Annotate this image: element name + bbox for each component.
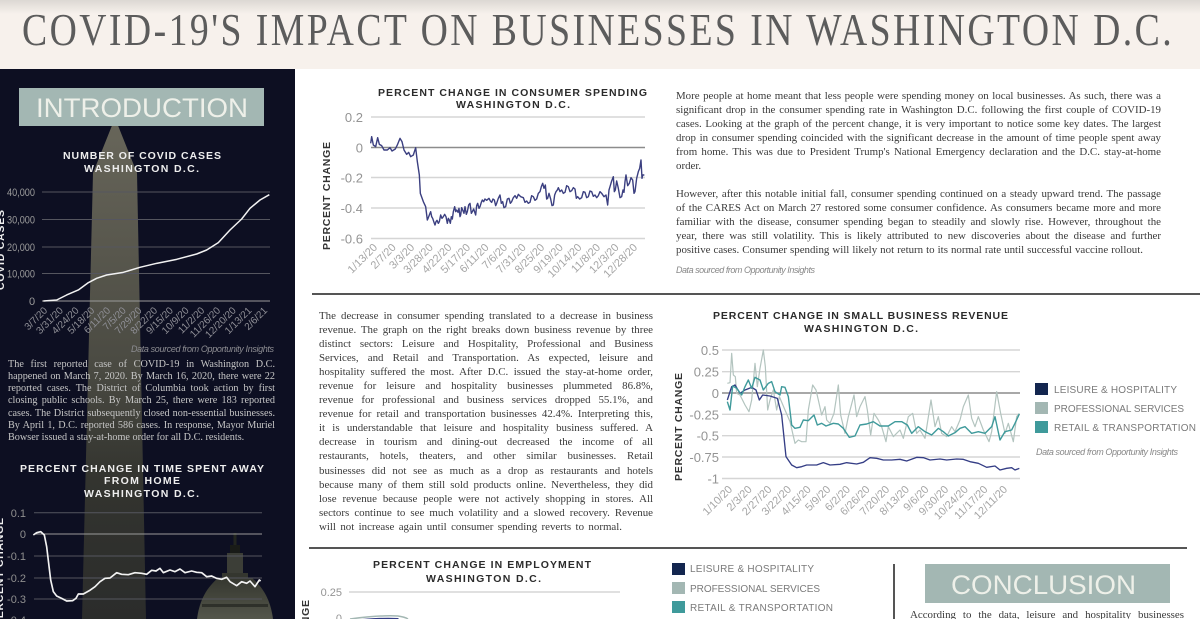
chart: number of covid cases: 8/22/20 xyxy=(129,305,160,337)
chart: number of covid cases: 10,000 xyxy=(7,268,35,280)
legend: employment sectors: PROFESSIONAL SERVICES xyxy=(690,584,820,595)
chart: percent change in small business revenue: 4/15/20 xyxy=(779,484,814,518)
heading: conclusion: CONCLUSION xyxy=(951,570,1136,600)
chart: percent change in small business revenue: WASHINGTON D.C. xyxy=(804,323,918,335)
title banner: COVID-19'S IMPACT ON BUSINESSES IN WASHINGTON D.C. xyxy=(22,6,1172,56)
chart: percent change in small business revenue: 7/20/20 xyxy=(858,484,892,518)
chart: number of covid cases: 10/9/20 xyxy=(160,305,192,337)
title banner xyxy=(0,0,1200,69)
chart: number of covid cases: 3/31/20 xyxy=(34,305,66,337)
chart: number of covid cases: 0 xyxy=(29,296,35,308)
text: business revenue analysis: revenue for leisure and hospitality businesses plummeted 86.8%, xyxy=(319,380,653,392)
chart: percent change in small business revenue: 3/22/20 xyxy=(760,484,794,518)
legend: revenue sectors: PROFESSIONAL SERVICES xyxy=(1054,404,1184,415)
chart: percent change in small business revenue: -0.25 xyxy=(689,407,719,422)
text: business revenue analysis: distinct sectors: Leisure and Hospitality, Professional and Business xyxy=(319,338,653,350)
chart: number of covid cases: 40,000 xyxy=(7,187,35,199)
text: business revenue analysis: lose revenue because people were not actively shopping in stores. All xyxy=(319,493,653,505)
chart: number of covid cases: NUMBER OF COVID CASES xyxy=(63,150,221,162)
chart: percent change in consumer spending: 7/6/20 xyxy=(480,242,510,272)
legend: employment sectors xyxy=(672,563,833,614)
chart: percent change in consumer spending: PERCENT CHANGE xyxy=(321,142,333,250)
chart: percent change in consumer spending: 5/17/20 xyxy=(439,242,473,276)
chart: percent change in consumer spending: 8/25/20 xyxy=(513,242,547,276)
icon: Washington Monument xyxy=(82,118,146,619)
text: introduction paragraph: Bowser issued a stay-at-home order for all D.C. residents. xyxy=(8,432,244,443)
chart: percent change in consumer spending xyxy=(321,87,647,280)
chart: percent change in employment: PERCENT CHANGE IN EMPLOYMENT xyxy=(373,559,592,571)
paragraph: consumer spending drop: More people at home meant that less people were spending money on local businesses. As such, there was a xyxy=(676,90,1161,102)
chart: percent change in small business revenue: 9/30/20 xyxy=(917,484,951,518)
chart: number of covid cases: 12/20/20 xyxy=(203,305,239,341)
chart: percent change in consumer spending: 12/28/20 xyxy=(601,242,640,280)
chart: percent change in small business revenue: 8/13/20 xyxy=(877,484,912,518)
legend: revenue sectors xyxy=(1035,383,1196,457)
chart: number of covid cases: Data sourced from Opportunity Insights xyxy=(131,344,274,354)
chart: percent change in consumer spending: 6/11/20 xyxy=(458,242,492,275)
chart: percent change in consumer spending: 3/28/20 xyxy=(401,242,436,276)
chart: percent change in time spent away from home: -0.1 xyxy=(7,551,26,563)
text: consumer spending analysis xyxy=(676,90,1161,275)
paragraph: consumer spending drop: cases. Looking at the graph of the percent change, it is very important to notice some key dates. The largest xyxy=(676,118,1161,130)
chart: percent change in consumer spending: 7/31/20 xyxy=(494,242,529,276)
paragraph: consumer spending drop: order. xyxy=(676,160,701,172)
text: business revenue analysis: Services, and Retail and Transportation. As expected, leisure and xyxy=(319,352,653,364)
text: business revenue analysis: revenue. The graph on the right breaks down business revenue by three xyxy=(319,324,653,336)
chart: percent change in small business revenue: 6/2/20 xyxy=(823,484,853,514)
text: business revenue analysis: revenue for retail and transportation businesses 42.4%. Interpreting this, xyxy=(319,408,653,420)
chart: percent change in small business revenue: 2/3/20 xyxy=(725,484,755,514)
paragraph: consumer spending drop: drop in consumer spending coincided with the significant decrease in the amount of time people spent away xyxy=(676,132,1161,144)
chart: percent change in small business revenue: -1 xyxy=(707,472,719,486)
source note: Data sourced from Opportunity Insights xyxy=(676,265,816,275)
chart: percent change in consumer spending: PERCENT CHANGE IN CONSUMER SPENDING xyxy=(378,87,647,99)
chart: percent change in consumer spending: 11/8/20 xyxy=(569,242,603,275)
chart: percent change in small business revenue: 10/24/20 xyxy=(932,484,971,522)
chart: percent change in consumer spending: 9/19/20 xyxy=(531,242,566,276)
text: introduction paragraph: closing public schools. By March 25, there were 183 reported xyxy=(8,395,275,406)
chart: number of covid cases: 3/7/20 xyxy=(23,305,50,333)
legend: revenue sectors: LEISURE & HOSPITALITY xyxy=(1054,385,1177,396)
chart: percent change in employment: WASHINGTON D.C. xyxy=(426,573,541,585)
legend: employment sectors: RETAIL & TRANSPORTATION xyxy=(690,603,833,614)
text: business revenue analysis: decrease in tourism and dining-out decreased the income of all xyxy=(319,436,653,448)
heading: conclusion xyxy=(925,564,1170,603)
chart: number of covid cases: WASHINGTON D.C. xyxy=(84,163,199,175)
chart: percent change in small business revenue: 1/10/20 xyxy=(701,484,735,518)
text: business revenue analysis: because many of them still sold products online. Nevertheless, they did xyxy=(319,479,653,491)
chart: number of covid cases: 6/11/20 xyxy=(82,305,113,336)
paragraph: consumer spending recovery: of the CARES Act on March 27 restored some consumer confidence. As consumers became more and more xyxy=(676,202,1161,214)
chart: number of covid cases: 11/26/20 xyxy=(188,305,223,340)
chart: number of covid cases: 30,000 xyxy=(7,214,35,226)
paragraph: consumer spending drop xyxy=(676,90,1161,172)
chart: percent change in small business revenue: -0.5 xyxy=(697,429,719,444)
chart: percent change in consumer spending: -0.6 xyxy=(341,232,363,246)
chart: percent change in small business revenue: 9/6/20 xyxy=(901,484,932,514)
icon: Capitol dome xyxy=(197,533,273,619)
text: introduction paragraph: cases. The District subsequently closed non-essential businesses. xyxy=(8,408,275,419)
chart: percent change in small business revenue: 11/17/20 xyxy=(952,484,991,522)
chart: number of covid cases: 4/24/20 xyxy=(50,305,82,337)
paragraph: consumer spending recovery xyxy=(676,188,1161,256)
chart: number of covid cases: 20,000 xyxy=(7,242,35,254)
chart: percent change in consumer spending: -0.4 xyxy=(341,201,363,216)
panel: conclusion xyxy=(910,564,1184,619)
heading: introduction: INTRODUCTION xyxy=(36,93,248,123)
chart: percent change in time spent away from home: -0.2 xyxy=(7,573,26,585)
chart: percent change in consumer spending: WASHINGTON D.C. xyxy=(456,99,570,111)
text: business revenue analysis: revenue for professional and business services dropped 55.1%, and xyxy=(319,394,653,406)
paragraph: consumer spending recovery: positive cases. Consumer spending will likely not return to its normal rate until successful vaccine rollout. xyxy=(676,244,1143,256)
chart: percent change in small business revenue: 2/27/20 xyxy=(740,484,774,518)
chart: percent change in time spent away from home: 0.1 xyxy=(11,508,26,520)
chart: percent change in consumer spending: 0.2 xyxy=(345,110,363,125)
chart: percent change in time spent away from home: PERCENT CHANGE IN TIME SPENT AWAY xyxy=(20,463,264,475)
chart: percent change in small business revenue: 0.5 xyxy=(701,343,719,358)
chart: percent change in consumer spending: 3/3/20 xyxy=(387,242,417,272)
chart: percent change in consumer spending: 2/7/20 xyxy=(369,242,399,272)
legend: employment sectors: LEISURE & HOSPITALITY xyxy=(690,564,814,575)
paragraph: consumer spending recovery: familiar with the disease, consumer spending began to steadily and slowly rise. However, throughout the xyxy=(676,216,1161,228)
chart: percent change in small business revenue: 0.25 xyxy=(694,365,719,380)
legend: revenue sectors: RETAIL & TRANSPORTATION xyxy=(1054,423,1196,434)
chart: percent change in consumer spending: -0.2 xyxy=(341,170,363,186)
chart: percent change in small business revenue: 12/11/20 xyxy=(972,484,1010,522)
chart: number of covid cases xyxy=(0,150,274,354)
text: introduction paragraph: By April 1, D.C. reported 586 cases. In response, Mayor Muriel xyxy=(8,420,275,431)
chart: number of covid cases: 1/13/21 xyxy=(223,305,255,337)
text: business revenue analysis: hospitality suffered the most. After D.C. issued the stay-at-home order, xyxy=(319,366,653,378)
chart: number of covid cases: 11/2/20 xyxy=(176,305,208,336)
text: introduction paragraph xyxy=(8,358,275,443)
paragraph: consumer spending recovery: year, there was still volatility. This is likely attributed to new discoveries about the disease and further xyxy=(676,230,1161,242)
chart: number of covid cases: 7/5/20 xyxy=(101,305,129,333)
chart: percent change in consumer spending: 0 xyxy=(356,140,363,156)
heading: introduction xyxy=(19,88,264,126)
legend: revenue sectors: Data sourced from Opportunity Insights xyxy=(1036,447,1178,457)
text: business revenue analysis xyxy=(319,310,653,533)
chart: percent change in time spent away from home: 0 xyxy=(20,529,26,541)
chart: percent change in time spent away from home: WASHINGTON D.C. xyxy=(84,488,199,500)
chart: percent change in consumer spending: 12/3/20 xyxy=(587,242,622,276)
text: business revenue analysis: businesses did not see as much as a drop as restaurants and hotels xyxy=(319,465,653,477)
chart: number of covid cases: 5/18/20 xyxy=(66,305,98,337)
text: introduction paragraph: happened on March 7, 2020. By March 16, 2020, there were 22 xyxy=(8,371,275,382)
chart: percent change in time spent away from home xyxy=(0,463,264,619)
chart: percent change in time spent away from home: FROM HOME xyxy=(104,475,180,487)
text: business revenue analysis: The decrease in consumer spending translated to a decrease in business xyxy=(319,310,653,322)
divider xyxy=(309,547,1187,549)
text: business revenue analysis: sectors continue to see much volatility and a slowed recovery. Revenue xyxy=(319,507,653,519)
divider xyxy=(893,564,895,619)
text: introduction paragraph: The first reported case of COVID-19 in Washington D.C. xyxy=(8,358,275,370)
chart: percent change in consumer spending: 10/14/20 xyxy=(546,242,584,280)
chart: percent change in small business revenue: 6/26/20 xyxy=(838,484,873,518)
text: business revenue analysis: will not increase again until consumer spending reverts to normal. xyxy=(319,521,622,533)
chart: percent change in small business revenue: PERCENT CHANGE xyxy=(673,373,685,481)
divider xyxy=(312,293,1200,295)
chart: percent change in small business revenue: 0 xyxy=(712,386,719,401)
text: business revenue analysis: it is understandable that leisure and hospitality business suffered. A xyxy=(319,422,653,434)
chart: number of covid cases: 9/15/20 xyxy=(144,305,176,337)
chart: percent change in consumer spending: 1/13/20 xyxy=(346,242,380,276)
chart: percent change in time spent away from home: -0.3 xyxy=(7,594,26,606)
paragraph: consumer spending drop: from home. This was due to President Trump's National Emergency declaration and the D.C. stay-at-home xyxy=(676,146,1161,158)
chart: percent change in small business revenue: 5/9/20 xyxy=(803,484,833,514)
chart: number of covid cases: 2/6/21 xyxy=(243,305,270,333)
chart: percent change in employment xyxy=(300,559,620,619)
chart: number of covid cases: 7/29/20 xyxy=(113,305,145,337)
text: business revenue analysis: restaurants, hotels, theaters, and other similar businesses. Retail xyxy=(319,450,653,462)
chart: percent change in small business revenue xyxy=(673,310,1196,522)
chart: percent change in employment: 0.25 xyxy=(321,587,342,599)
paragraph: consumer spending recovery: However, after this notable initial fall, consumer spending continued on a steady upward trend. The passage xyxy=(676,188,1161,200)
paragraph: consumer spending drop: significant drop in the consumer spending rate in Washington D.C. following the first couple of COVID-19 xyxy=(676,104,1161,116)
text: introduction paragraph: reported cases. The District of Columbia took action by first xyxy=(8,383,275,394)
chart: percent change in consumer spending: 4/22/20 xyxy=(420,242,454,276)
chart: percent change in small business revenue: -0.75 xyxy=(689,450,719,465)
chart: percent change in small business revenue: PERCENT CHANGE IN SMALL BUSINESS REVENUE xyxy=(713,310,1008,322)
panel: introduction xyxy=(0,69,295,619)
